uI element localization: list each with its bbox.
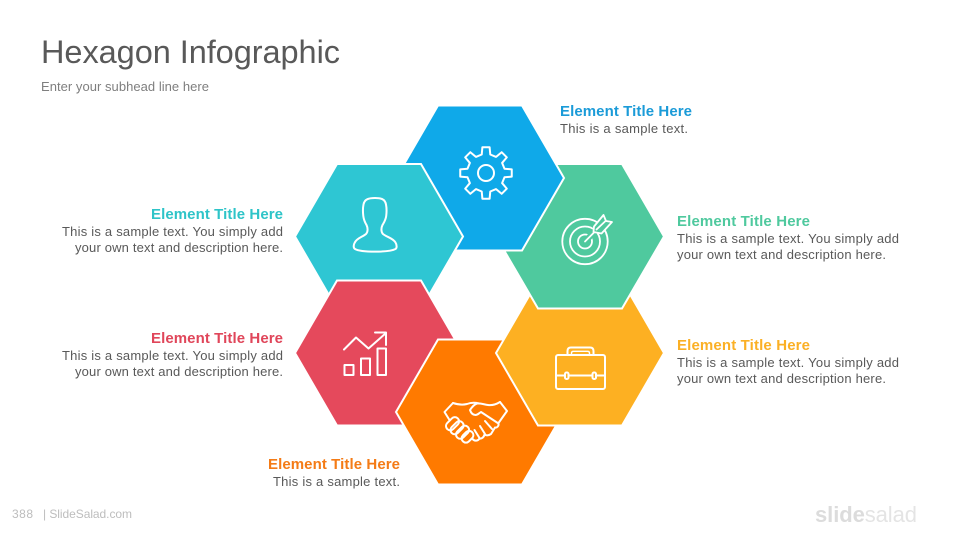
text block: green element: Element Title Here [677, 213, 810, 230]
hexagon: green [496, 164, 664, 308]
text block: blue element: Element Title Here [560, 103, 692, 120]
hexagon: yellow [496, 280, 664, 426]
text block: yellow element: your own text and description here. [677, 371, 886, 386]
text block: teal element: your own text and description here. [75, 240, 283, 255]
footer: page number: 388 [12, 507, 33, 521]
text block: blue element: This is a sample text. [560, 121, 688, 136]
text block: green element [677, 213, 899, 262]
text block: teal element: Element Title Here [151, 206, 283, 223]
text block: orange element: This is a sample text. [273, 474, 400, 489]
hexagon: teal [295, 164, 463, 309]
icon: briefcase [556, 348, 605, 389]
icon: rising chart [344, 332, 386, 375]
hexagon: green overlap on top of yellow [530, 280, 630, 310]
text block: yellow element: Element Title Here [677, 337, 810, 354]
icon: gear [460, 147, 512, 199]
hexagon: blue [396, 106, 564, 250]
text block: yellow element: This is a sample text. You simply add [677, 355, 899, 370]
title: Hexagon Infographic [41, 34, 340, 70]
text block: red element [62, 330, 283, 379]
icon: person [354, 198, 397, 252]
subhead: Enter your subhead line here [41, 79, 209, 94]
text block: teal element: This is a sample text. You simply add [62, 224, 283, 239]
hexagon: orange [396, 340, 564, 484]
text block: green element: This is a sample text. You simply add [677, 231, 899, 246]
text block: blue element [560, 103, 692, 136]
icon: handshake [444, 402, 507, 444]
text block: green element: your own text and description here. [677, 247, 886, 262]
text block: red element: Element Title Here [151, 330, 283, 347]
text block: yellow element [677, 337, 899, 386]
text block: orange element: Element Title Here [268, 456, 400, 473]
hexagon: red [295, 280, 463, 426]
text block: orange element [268, 456, 400, 489]
text block: teal element [62, 206, 283, 255]
text block: red element: your own text and description here. [75, 364, 283, 379]
logo: slidesalad: slidesalad [815, 502, 917, 527]
icon: target [562, 215, 612, 264]
text block: red element: This is a sample text. You simply add [62, 348, 283, 363]
footer: page number: | SlideSalad.com [43, 507, 132, 521]
